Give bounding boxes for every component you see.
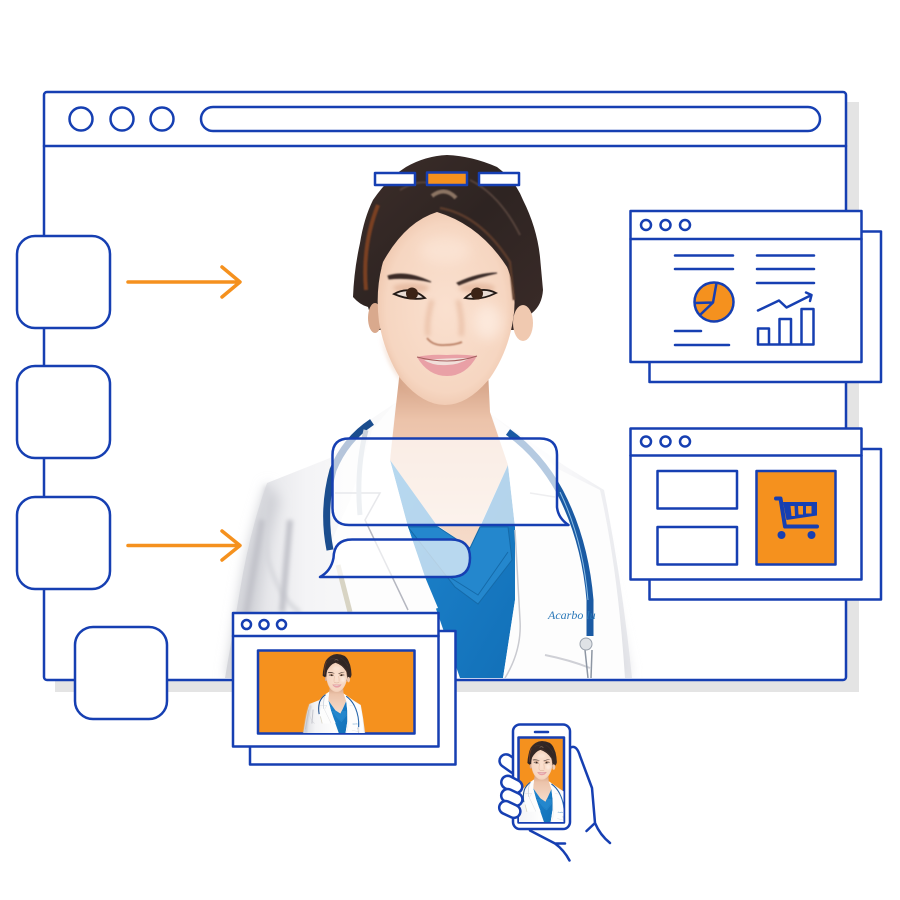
phone doctor	[519, 741, 564, 822]
address bar	[201, 107, 820, 131]
video frame	[258, 650, 414, 734]
doctor portrait	[225, 155, 632, 678]
phone body	[513, 724, 570, 829]
phone in hand	[497, 724, 610, 860]
slider tabs	[375, 172, 519, 185]
phone screen	[518, 738, 564, 822]
text lines	[675, 256, 814, 345]
background shadow of main browser	[55, 102, 859, 692]
main browser window	[44, 92, 846, 680]
arrow upper	[128, 267, 240, 297]
panel: analytics window	[630, 211, 881, 382]
arrow lower	[128, 531, 240, 560]
panel: video window	[233, 613, 456, 764]
product placeholders	[658, 471, 737, 508]
product tile with cart	[756, 471, 836, 564]
icon: pie chart	[694, 282, 734, 322]
lower fingers	[497, 774, 525, 820]
icon: shopping cart	[776, 498, 817, 539]
top finger	[497, 752, 524, 776]
icon: bar chart with arrow	[758, 292, 814, 344]
mini doctor	[303, 654, 365, 734]
panel: shop window	[630, 428, 881, 600]
hand outline	[530, 747, 610, 860]
side module boxes	[17, 236, 167, 719]
browser buttons	[70, 108, 174, 130]
chat bubble small	[320, 540, 470, 577]
chat bubble large	[332, 438, 568, 525]
